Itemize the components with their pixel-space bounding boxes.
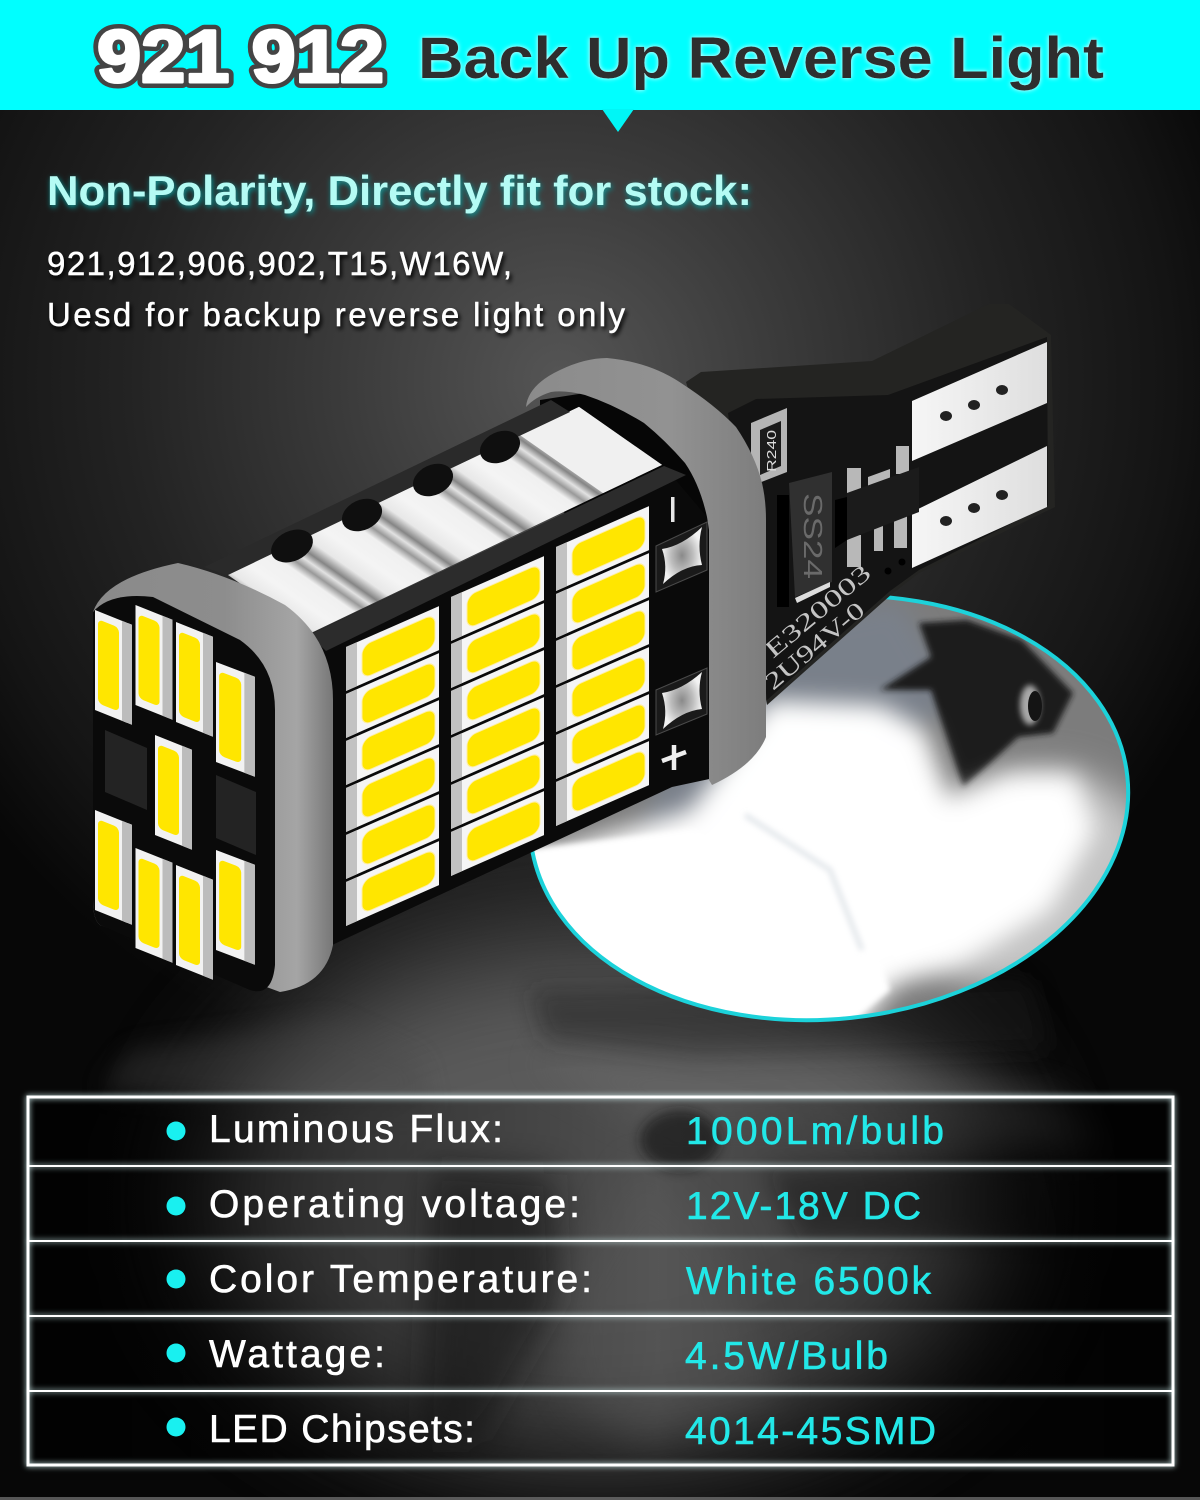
- far collar inner shadow: [540, 393, 712, 640]
- polarity pads and signs: [656, 497, 707, 770]
- front LED array: 18 chips: [346, 506, 649, 926]
- row: luminous flux: [166, 1108, 944, 1153]
- spec table: [27, 1097, 1174, 1465]
- title: 921 912: 921 912: [97, 15, 384, 98]
- pcb marking: [760, 560, 876, 696]
- title: 921 912: 921 912: [97, 15, 384, 98]
- diode SS24: [777, 472, 832, 607]
- table rows: [27, 1097, 1174, 1465]
- vias: [884, 558, 906, 574]
- fitment text: 921,912,906,902,T15,W16W,: [47, 245, 512, 282]
- row: color temperature: White 6500k: [686, 1260, 932, 1303]
- pcb tail: [686, 304, 1055, 705]
- header band: [0, 0, 1200, 132]
- row: led chipsets: [166, 1408, 936, 1453]
- light beam inset circle: [530, 596, 1130, 1022]
- row: operating voltage: Operating voltage:: [209, 1183, 580, 1226]
- row: wattage: Wattage:: [209, 1333, 385, 1376]
- table frame: [28, 1097, 1173, 1465]
- resistor R240: [751, 408, 787, 486]
- row: luminous flux: Luminous Flux:: [209, 1108, 503, 1151]
- row: color temperature: Color Temperature:: [209, 1258, 592, 1301]
- fitment text: [47, 245, 626, 333]
- cyan ellipse outline: [509, 567, 1149, 1049]
- far collar: [526, 358, 766, 785]
- diode SS24: SS24: [798, 493, 828, 579]
- pcb marking: 2U94V-0: [760, 597, 870, 696]
- row: led chipsets: LED Chipsets:: [209, 1408, 475, 1451]
- row: wattage: [166, 1333, 888, 1378]
- transistor: [835, 446, 919, 567]
- row: wattage: 4.5W/Bulb: [685, 1335, 888, 1378]
- bulb: [93, 304, 1055, 992]
- end LED array: 9 chips: [95, 605, 256, 980]
- front pcb face: [309, 466, 714, 945]
- end collar: [93, 563, 333, 992]
- fin back rail: [204, 400, 570, 575]
- title: Back Up Reverse Light: Back Up Reverse Light: [418, 26, 1104, 91]
- fitment text: Uesd for backup reverse light only: [47, 296, 626, 333]
- row: color temperature: [166, 1258, 932, 1303]
- fin notches: [266, 425, 525, 569]
- header pointer: [602, 109, 634, 132]
- row: luminous flux: 1000Lm/bulb: [686, 1110, 944, 1153]
- heat sink top fins: [204, 400, 662, 633]
- contact pads: [912, 342, 1047, 568]
- row: led chipsets: 4014-45SMD: [685, 1410, 936, 1453]
- subheading: Non-Polarity, Directly fit for stock:: [47, 167, 752, 214]
- end pcb face: [93, 596, 275, 991]
- resistor R240: R240: [764, 430, 779, 472]
- pcb marking: E320003: [760, 560, 876, 664]
- row: operating voltage: [166, 1183, 921, 1228]
- row: operating voltage: 12V-18V DC: [686, 1185, 921, 1228]
